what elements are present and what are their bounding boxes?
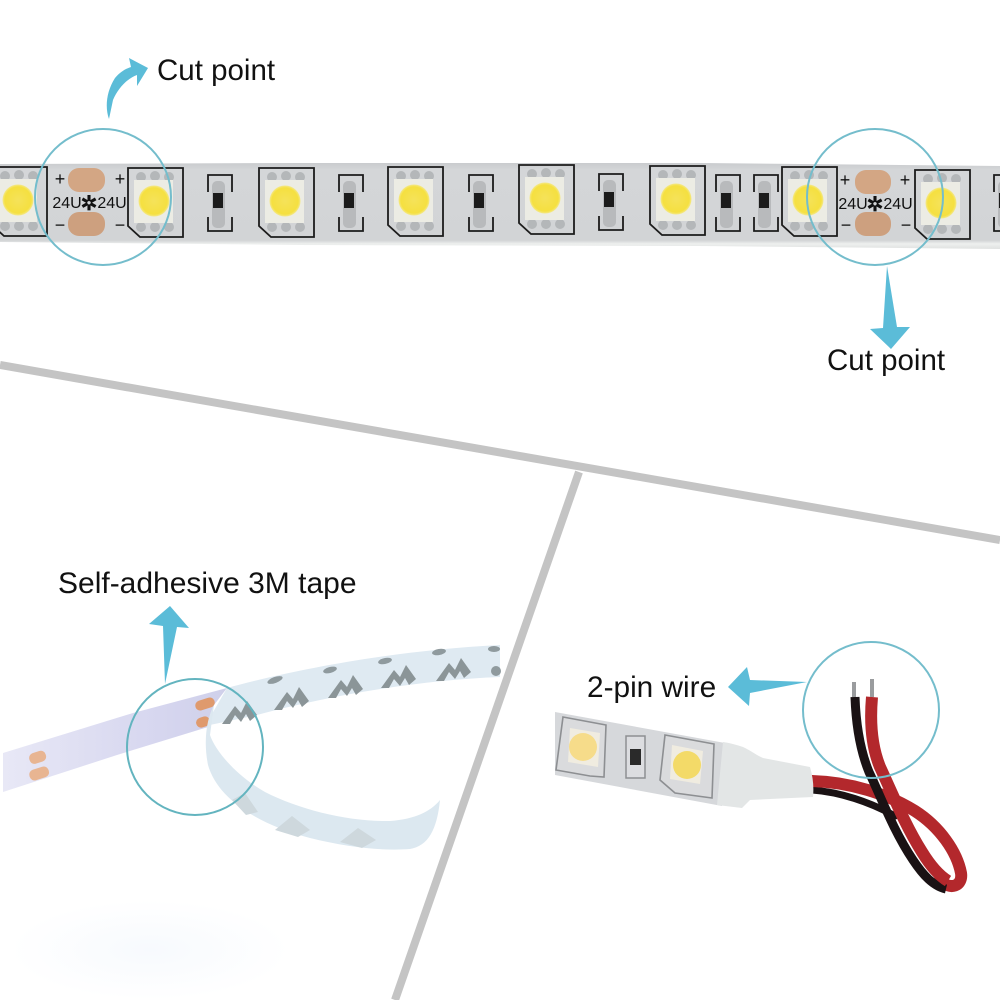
strip front (3, 688, 227, 792)
right copper pads and marks: − (901, 215, 911, 235)
right copper pads and marks: + (840, 170, 850, 190)
callout circle: right cut point (807, 129, 943, 265)
copper pads (28, 696, 216, 782)
lead: lower run into the loop (812, 781, 961, 886)
resistor (626, 736, 645, 778)
resistors (208, 174, 1000, 231)
connector boot (717, 742, 813, 808)
panel: self-adhesive tape (3, 645, 501, 1000)
left copper pads and marks: ✲ (81, 193, 97, 215)
right copper pads and marks: 24U (883, 196, 913, 213)
label: tape: Self-adhesive 3M tape (58, 567, 357, 600)
arrow: down to lower cut point label (870, 266, 910, 349)
label: lower cut point: Cut point (827, 344, 945, 377)
right copper pads and marks: + (900, 170, 910, 190)
LED modules (0, 165, 970, 239)
curled tape end (206, 705, 440, 850)
left copper pads and marks: − (55, 215, 65, 235)
callout circle: left cut point (35, 129, 171, 265)
faint print on curl (232, 793, 376, 848)
callout circle: wire (803, 642, 939, 778)
callout circle: tape (127, 679, 263, 815)
lead: upright pair (855, 697, 948, 889)
right copper pads and marks: 24U (838, 196, 868, 213)
tape back with 3M print (205, 645, 500, 726)
wire tips (854, 679, 872, 697)
label: wire: 2-pin wire (587, 671, 716, 704)
arrow: left to wire label (728, 667, 807, 706)
left copper pads and marks: 24U (52, 195, 82, 212)
strip end (555, 712, 725, 806)
left copper pads and marks: 24U (97, 195, 127, 212)
left copper pads and marks: − (115, 215, 125, 235)
right copper pads and marks: − (841, 215, 851, 235)
soft shadow under tape (10, 900, 290, 1000)
arrow: curved to top cut point label (107, 58, 148, 119)
LED strip body (0, 163, 1000, 249)
printed marks (222, 646, 501, 724)
panel: 2-pin wire (555, 679, 961, 889)
right copper pads and marks (838, 170, 913, 236)
panel: top strip (0, 163, 1000, 249)
divider: vertical diagonal (395, 472, 579, 1000)
arrow: up to tape label (149, 606, 189, 684)
label: top cut point: Cut point (157, 54, 275, 87)
divider: horizontal diagonal (0, 365, 1000, 540)
left copper pads and marks: + (55, 169, 65, 189)
left copper pads and marks: + (115, 169, 125, 189)
right copper pads and marks: ✲ (867, 194, 883, 216)
left copper pads and marks (52, 168, 127, 236)
LED modules (556, 717, 714, 798)
